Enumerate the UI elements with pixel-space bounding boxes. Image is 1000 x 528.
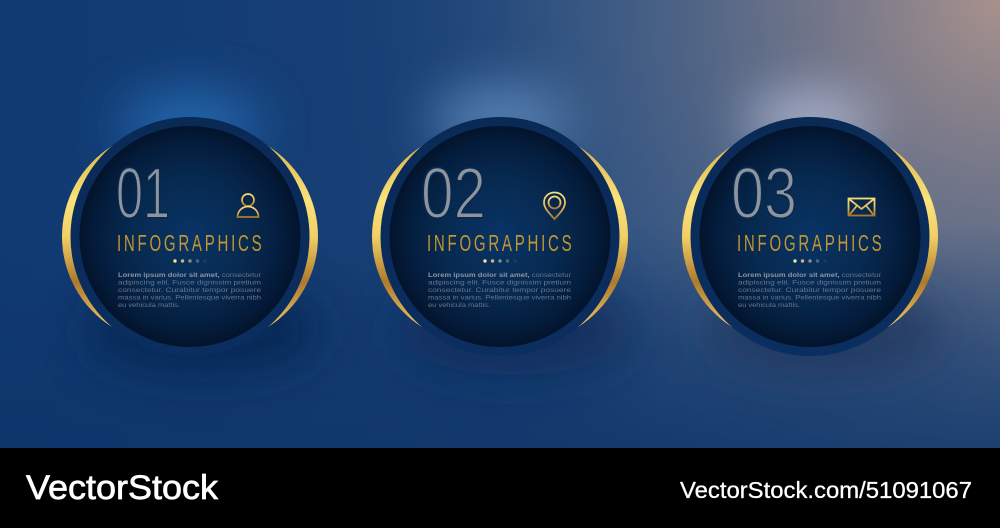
icon: person: [238, 194, 258, 217]
body text: massa in varius. Pellentesque viverra nibh: [428, 296, 571, 302]
outer ring: [690, 117, 930, 356]
body text: adipiscing elit. Fusce dignissim pretium: [738, 280, 881, 286]
gold crescent left: [372, 146, 422, 327]
number 02: 02: [421, 154, 486, 234]
body text: massa in varius. Pellentesque viverra nibh: [118, 296, 261, 302]
number 01: 01: [116, 154, 170, 234]
body text: [738, 273, 882, 309]
body text: adipiscing elit. Fusce dignissim pretium: [118, 280, 261, 286]
body text: consectetur. Curabitur tempor posuere: [738, 288, 882, 294]
gold crescent left: [682, 146, 732, 327]
icon: envelope: [848, 198, 874, 216]
body text: consectetur. Curabitur tempor posuere: [428, 288, 572, 294]
number 03: 03: [731, 154, 797, 234]
inner disc: [390, 126, 610, 347]
gold crescent right: [578, 146, 628, 327]
pagination dots: [483, 259, 517, 263]
inner disc: [80, 126, 300, 347]
body text: eu vehicula mattis.: [738, 303, 800, 309]
gold crescent left: [62, 146, 112, 327]
body text: eu vehicula mattis.: [118, 303, 180, 309]
body text: consectetur. Curabitur tempor posuere: [118, 288, 262, 294]
body text: [428, 273, 572, 309]
gold crescent right: [888, 146, 938, 327]
panel: step 03: [682, 94, 945, 375]
watermark footer bar: [0, 448, 1000, 528]
icon: location pin: [544, 192, 565, 219]
body text: massa in varius. Pellentesque viverra nibh: [738, 296, 881, 302]
outer ring: [70, 117, 310, 356]
heading: INFOGRAPHICS: [737, 231, 882, 257]
body text: Lorem ipsum dolor sit amet, consectetur: [738, 273, 881, 279]
gold crescent right: [268, 146, 318, 327]
pagination dots: [793, 259, 827, 263]
body text: adipiscing elit. Fusce dignissim pretium: [428, 280, 571, 286]
body text: Lorem ipsum dolor sit amet, consectetur: [118, 273, 261, 279]
heading: INFOGRAPHICS: [117, 231, 262, 257]
body text: eu vehicula mattis.: [428, 303, 490, 309]
brand name: VectorStock: [26, 469, 219, 507]
outer ring: [380, 117, 620, 356]
panel: step 02: [372, 88, 635, 375]
inner disc: [700, 126, 920, 347]
pagination dots: [173, 259, 207, 263]
body text: [118, 273, 262, 309]
heading: INFOGRAPHICS: [427, 231, 572, 257]
image reference url: VectorStock.com/51091067: [680, 477, 972, 503]
body text: Lorem ipsum dolor sit amet, consectetur: [428, 273, 571, 279]
panel: step 01: [62, 93, 325, 375]
